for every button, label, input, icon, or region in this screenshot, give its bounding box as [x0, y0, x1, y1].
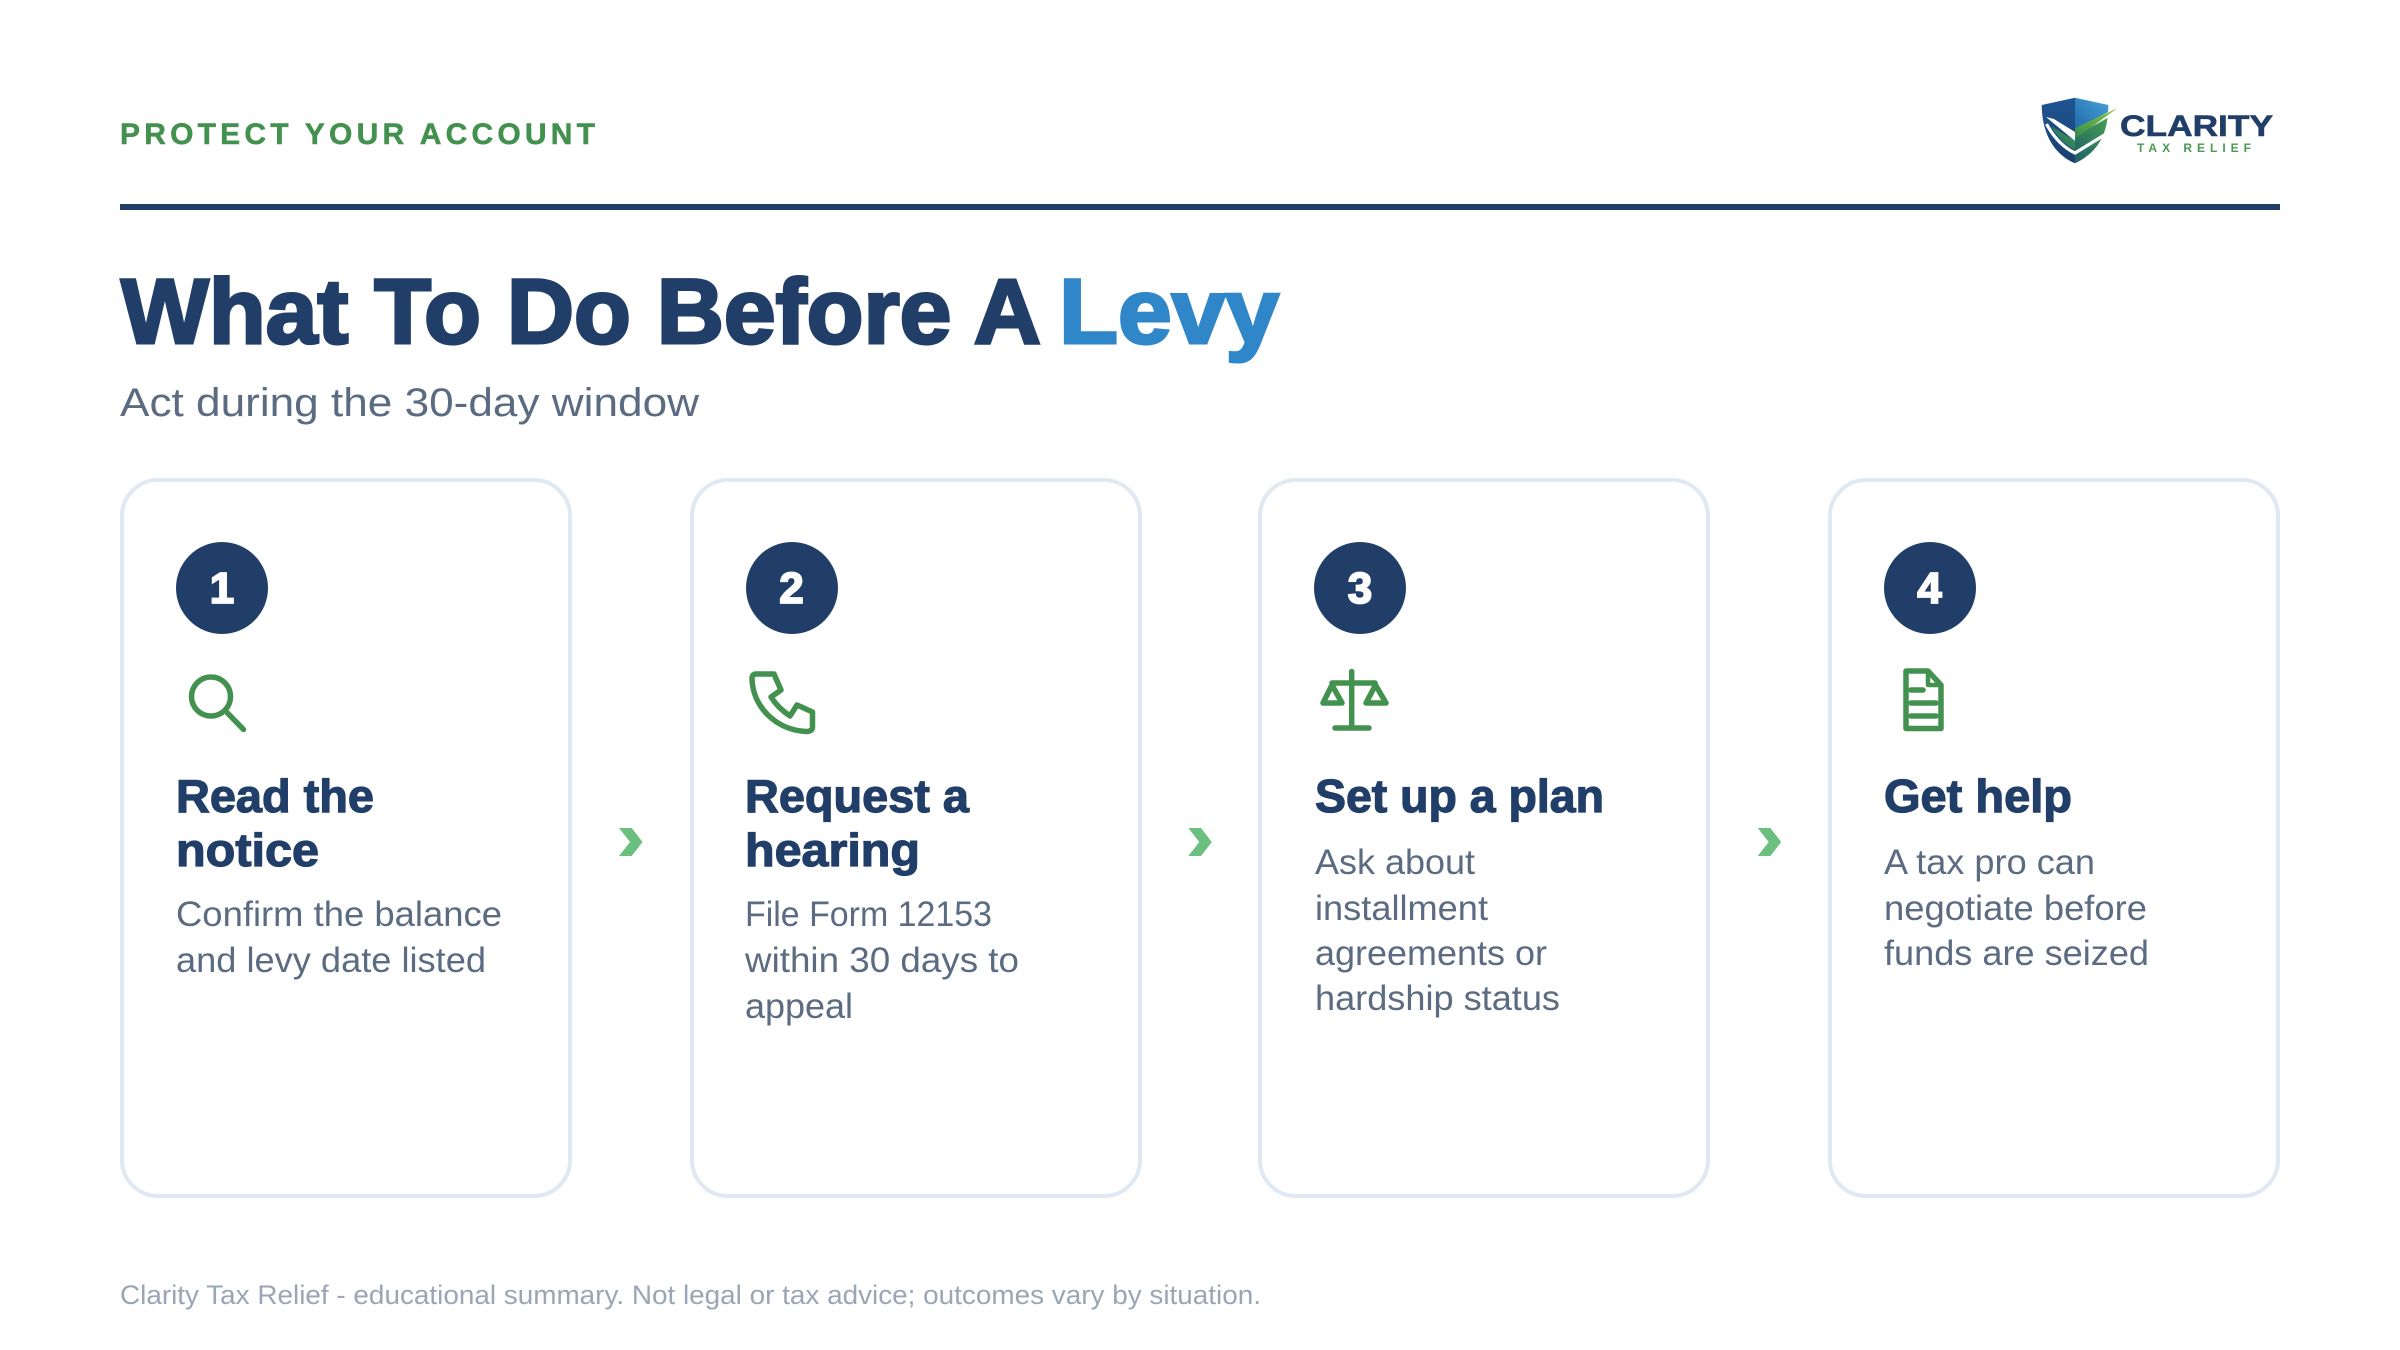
step heading: Set up a plan: [1315, 770, 1604, 822]
icon: shield: [2042, 98, 2117, 163]
number badge 3: [1314, 542, 1406, 634]
eyebrow label: PROTECT YOUR ACCOUNT: [120, 118, 595, 151]
title: What To Do Before A: [121, 261, 1041, 363]
card outline: [1830, 480, 2278, 1196]
step description: Confirm the balance: [176, 895, 502, 934]
step description: funds are seized: [1884, 934, 2149, 973]
step heading: notice: [176, 824, 319, 876]
step description: hardship status: [1315, 979, 1560, 1018]
step heading: Request a: [745, 770, 969, 822]
step description: [176, 895, 502, 980]
number badge 2: [746, 542, 838, 634]
number badge 1: [176, 542, 268, 634]
logo: Clarity Tax Relief: [2042, 98, 2273, 163]
step description: appeal: [745, 987, 853, 1026]
step description: Ask about: [1315, 843, 1475, 882]
step heading: [745, 770, 969, 876]
step description: and levy date listed: [176, 941, 486, 980]
arrow 2 to 3: [1188, 828, 1212, 856]
icon: telephone: [752, 674, 812, 732]
arrow 1 to 2: [619, 828, 642, 856]
number badge 3: 3: [1348, 564, 1372, 613]
panel: step 2 request a hearing: [692, 480, 1140, 1196]
card outline: [122, 480, 570, 1196]
step description: A tax pro can: [1884, 843, 2095, 882]
step description: within 30 days to: [744, 941, 1019, 980]
step description: agreements or: [1315, 934, 1547, 973]
icon: magnifying glass: [192, 677, 244, 730]
panel: step 3 set up a plan: [1260, 480, 1708, 1196]
step description: [744, 895, 1019, 1026]
step heading: Get help: [1884, 770, 2072, 822]
step description: [1884, 843, 2149, 973]
step description: negotiate before: [1884, 889, 2147, 928]
card outline: [1260, 480, 1708, 1196]
number badge 2: 2: [779, 564, 804, 613]
number badge 4: [1884, 542, 1976, 634]
panel: step 1 read the notice: [122, 480, 570, 1196]
number badge 1: 1: [210, 564, 234, 613]
header rule: [120, 204, 2280, 210]
number badge 4: 4: [1917, 564, 1942, 613]
icon: document: [1906, 671, 1941, 728]
panel: step 4 get help: [1830, 480, 2278, 1196]
card outline: [692, 480, 1140, 1196]
logo wordmark: CLARITY: [2120, 110, 2273, 143]
step heading: hearing: [745, 824, 920, 876]
subtitle: Act during the 30-day window: [120, 381, 699, 425]
footer disclaimer: Clarity Tax Relief - educational summary. Not legal or tax advice; outcomes vary by situation.: [120, 1280, 1261, 1310]
step description: [1315, 843, 1560, 1018]
title accent word: Levy: [1059, 261, 1279, 363]
step description: File Form 12153: [745, 895, 992, 934]
icon: balance scales: [1323, 672, 1386, 728]
step heading: Read the: [176, 770, 374, 822]
step description: installment: [1315, 889, 1488, 928]
logo tagline: TAX RELIEF: [2137, 141, 2251, 155]
step heading: [176, 770, 374, 876]
arrow 3 to 4: [1758, 828, 1781, 856]
